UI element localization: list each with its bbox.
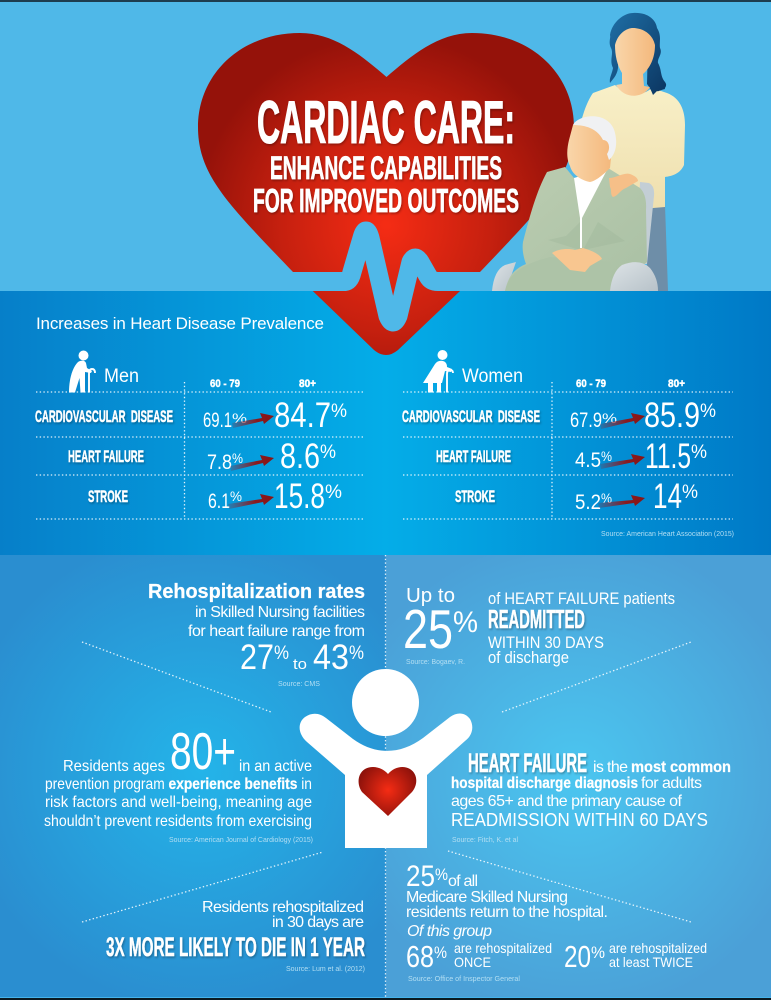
source: american heart association: Source: American Heart Association (2015) (601, 529, 734, 538)
stat: heart failure most common discharge diagnosis: READMISSION WITHIN 60 DAYS (451, 809, 708, 830)
stat: rehospitalization rates: 43 (313, 638, 349, 677)
stat: 25% of medicare residents return: 25 (406, 860, 435, 893)
stat: heart failure most common discharge diagnosis: ages 65+ and the primary cause of (451, 793, 683, 810)
column headers: 80+ (668, 378, 685, 390)
title (253, 89, 519, 219)
stat: residents ages 80+: Source: American Journal of Cardiology (2015) (169, 835, 313, 844)
stat: 3x more likely to die: Source: Lum et al. (2012) (286, 964, 365, 973)
stat: 25% of medicare residents return: residents return to the hospital. (406, 904, 608, 921)
stat: heart failure most common discharge diagnosis: HEART FAILURE (468, 748, 587, 778)
title: CARDIAC CARE: (257, 89, 515, 156)
stat: up to 25% readmitted: Up to (406, 585, 455, 607)
wheelchair back (636, 182, 654, 264)
stat: 25% of medicare residents return: % (434, 943, 447, 962)
stat: rehospitalization rates: % (274, 643, 289, 664)
title: FOR IMPROVED OUTCOMES (253, 182, 519, 219)
stat: 25% of medicare residents return: 20 (564, 939, 591, 974)
row: cardiovascular disease, women: 85.9 (644, 396, 700, 435)
stat: 25% of medicare residents return: 68 (406, 939, 434, 974)
panel: women (402, 350, 733, 519)
column headers: 60 - 79 (210, 378, 240, 390)
stat: 25% of medicare residents return: at least TWICE (609, 954, 693, 970)
stat: up to 25% readmitted: of discharge (488, 649, 569, 667)
stat: rehospitalization rates: Source: CMS (278, 679, 320, 688)
row: cardiovascular disease, women: CARDIOVASCULAR DISEASE (402, 407, 540, 426)
women label: Women (462, 366, 523, 387)
stat: 25% of medicare residents return: % (435, 865, 448, 884)
man's hair (573, 116, 616, 160)
stat: 25% of medicare residents return: are rehospitalized (609, 940, 707, 956)
row: stroke, men: % (325, 482, 342, 503)
stat: residents ages 80+: risk factors and well-being, meaning age (45, 794, 312, 811)
column headers: 60 - 79 (576, 378, 606, 390)
stat: heart failure most common discharge diagnosis (451, 748, 731, 844)
stat: heart failure most common discharge diagnosis: for adults (641, 775, 702, 792)
row: cardiovascular disease, women (402, 396, 716, 435)
stat: rehospitalization rates: for heart failure range from (188, 623, 365, 640)
stat: up to 25% readmitted: % (453, 606, 478, 639)
bottom right background (386, 555, 771, 1000)
row: stroke, men (88, 477, 342, 516)
bottom left background (0, 555, 386, 1000)
stat: 3x more likely to die (106, 899, 365, 973)
row: heart failure, women: HEART FAILURE (436, 447, 511, 466)
row: heart failure, women: % (601, 448, 612, 464)
man's shirt collar and seam (574, 168, 608, 248)
row: stroke, men: STROKE (88, 487, 128, 506)
row: cardiovascular disease, men: % (232, 410, 247, 426)
row: heart failure, women: 4.5 (575, 449, 601, 472)
row: heart failure, men: % (232, 450, 243, 466)
stat: rehospitalization rates: in Skilled Nursing facilities (195, 604, 365, 621)
row: cardiovascular disease, men: % (331, 401, 347, 422)
stat: up to 25% readmitted: READMITTED (488, 604, 585, 634)
left armrest (492, 262, 516, 291)
row: stroke, women: 5.2 (575, 491, 601, 514)
row: cardiovascular disease, men: 69.1 (203, 409, 232, 432)
woman's shirt (575, 85, 685, 208)
prevalence band background (0, 291, 771, 555)
stat: 25% of medicare residents return: % (591, 943, 605, 962)
top background (0, 0, 771, 292)
row: heart failure, women (436, 437, 707, 476)
stat: residents ages 80+: shouldn’t prevent residents from exercising (44, 813, 312, 830)
row: stroke, men: 6.1 (208, 490, 230, 513)
right armrest (610, 262, 658, 291)
row: heart failure, men: HEART FAILURE (68, 447, 144, 466)
stat: rehospitalization rates: 27 (240, 638, 274, 677)
stat: residents ages 80+: in an active (239, 758, 312, 775)
icon: elderly man with cane (69, 350, 95, 392)
row: stroke, men: % (230, 488, 242, 504)
stat: up to 25% readmitted: WITHIN 30 DAYS (488, 634, 604, 652)
stat: heart failure most common discharge diagnosis: is the (593, 759, 628, 776)
column headers: 80+ (299, 378, 316, 390)
stat: heart failure most common discharge diagnosis: hospital discharge diagnosis (451, 775, 638, 792)
stat: residents ages 80+ (44, 723, 313, 844)
row: stroke, women: STROKE (455, 487, 495, 506)
row: cardiovascular disease, women: % (700, 401, 716, 422)
icon: person with raised arms and heart (300, 669, 472, 848)
stat: up to 25% readmitted: of HEART FAILURE patients (488, 590, 675, 608)
panel: men (35, 350, 365, 519)
stat: residents ages 80+: prevention program experience benefits in (45, 776, 312, 793)
stat: rehospitalization rates: % (349, 643, 364, 664)
row: cardiovascular disease, men (35, 396, 347, 435)
row: cardiovascular disease, women: % (602, 410, 617, 426)
row: stroke, women: % (601, 490, 612, 506)
stat: 3x more likely to die: in 30 days are (272, 914, 364, 931)
column headers (576, 378, 685, 390)
row: heart failure, women: 11.5 (645, 437, 691, 476)
stat: up to 25% readmitted: Source: Bogaev, R. (406, 657, 465, 666)
stat: rehospitalization rates (148, 581, 365, 688)
woman's trousers (647, 205, 668, 291)
row: stroke, women: % (682, 482, 698, 503)
row: heart failure, men: % (320, 442, 336, 463)
row: stroke, women (455, 477, 698, 516)
stat: 25% of medicare residents return: Medicare Skilled Nursing (406, 889, 568, 906)
stat: heart failure most common discharge diagnosis: Source: Fitch, K. et al (452, 835, 518, 844)
man's face (567, 122, 612, 182)
stat: 3x more likely to die: 3X MORE LIKELY TO DIE IN 1 YEAR (106, 932, 365, 962)
jacket shading (548, 222, 625, 250)
stat: up to 25% readmitted (403, 585, 675, 667)
row: stroke, men: 15.8 (274, 477, 325, 516)
stat: 25% of medicare residents return (406, 860, 707, 983)
stat: up to 25% readmitted: 25 (403, 598, 453, 660)
stat: 25% of medicare residents return: Source: Office of Inspector General (408, 974, 520, 983)
row: cardiovascular disease, men: CARDIOVASCULAR DISEASE (35, 407, 173, 426)
hand on shoulder (609, 174, 638, 197)
row: heart failure, women: % (691, 442, 707, 463)
row: stroke, women: 14 (653, 477, 682, 516)
icon: elderly woman with cane (423, 350, 453, 392)
man's lap (505, 257, 611, 291)
man's hands (552, 248, 602, 272)
stat: residents ages 80+: Residents ages (63, 758, 165, 775)
stat: 25% of medicare residents return: Of this group (407, 923, 492, 940)
man's jacket (505, 167, 647, 291)
stat: 3x more likely to die: Residents rehospitalized (202, 899, 364, 916)
stat: heart failure most common discharge diagnosis: most common (631, 759, 731, 776)
icon: chest heart (359, 767, 416, 816)
column headers (210, 378, 316, 390)
illustration: caregiver and resident in wheelchair (492, 13, 685, 291)
stat: 25% of medicare residents return: of all (448, 873, 478, 890)
woman's face and neck (615, 28, 655, 96)
stat: 25% of medicare residents return: are rehospitalized (454, 940, 552, 956)
row: cardiovascular disease, men: 84.7 (274, 396, 331, 435)
row: heart failure, men (68, 437, 336, 476)
stat: 25% of medicare residents return: ONCE (454, 954, 491, 970)
stat: rehospitalization rates: Rehospitalization rates (148, 581, 365, 603)
heart with ECG line (198, 33, 574, 355)
title: ENHANCE CAPABILITIES (270, 150, 502, 186)
row: heart failure, men: 8.6 (280, 437, 320, 476)
section heading: prevalence: Increases in Heart Disease Prevalence (36, 314, 324, 333)
stat: rehospitalization rates: to (293, 656, 307, 673)
woman's hair (610, 13, 666, 95)
men label: Men (104, 366, 139, 387)
stat: residents ages 80+: 80+ (170, 723, 236, 781)
row: heart failure, men: 7.8 (207, 451, 232, 474)
row: cardiovascular disease, women: 67.9 (570, 409, 602, 432)
